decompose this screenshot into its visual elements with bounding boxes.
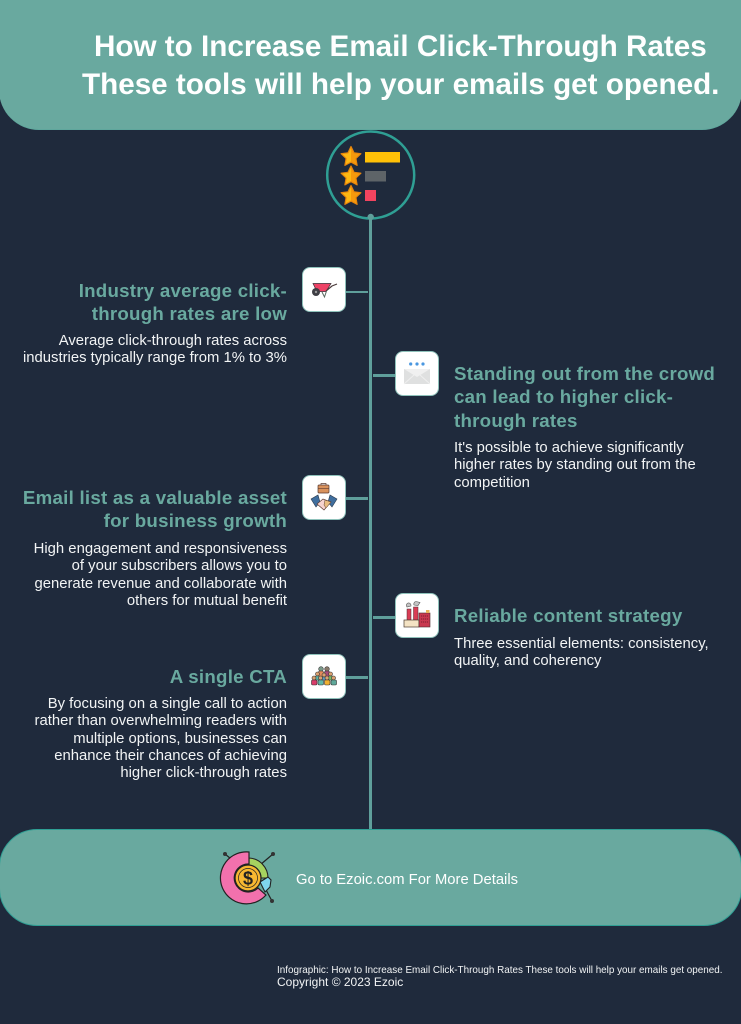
- description: of your subscribers allows you to: [72, 558, 287, 574]
- description: It's possible to achieve significantly: [454, 440, 684, 456]
- icon: star rating badge: [326, 130, 416, 220]
- title: These tools will help your emails get opened.: [82, 68, 719, 101]
- heading: [454, 363, 715, 431]
- icon: envelope: [395, 351, 439, 396]
- connector 4: [373, 616, 395, 618]
- description: [454, 440, 696, 491]
- description: others for mutual benefit: [127, 593, 287, 609]
- title: How to Increase Email Click-Through Rates: [94, 30, 707, 63]
- header banner: [0, 0, 741, 130]
- icon: crowd of people: [302, 654, 346, 699]
- connector 5: [346, 676, 368, 678]
- text block: email list: [23, 487, 287, 609]
- icon: dollar pie chart: $: [243, 868, 253, 888]
- heading: [23, 487, 287, 531]
- connector 3: [346, 497, 368, 500]
- description: enhance their chances of achieving: [54, 748, 287, 764]
- description: [35, 696, 287, 781]
- description: By focusing on a single call to action: [48, 696, 287, 712]
- heading: for business growth: [104, 510, 287, 531]
- description: higher click-through rates: [120, 765, 287, 781]
- heading: Standing out from the crowd: [454, 363, 715, 384]
- connector 2: [373, 374, 395, 376]
- text block: single CTA: [35, 666, 287, 781]
- icon: factory: [395, 593, 439, 638]
- description: Average click-through rates across: [59, 333, 287, 349]
- description: quality, and coherency: [454, 653, 601, 669]
- heading: [79, 280, 287, 324]
- text block: content strategy: [454, 605, 709, 669]
- heading: through rates: [454, 410, 578, 431]
- attribution: Infographic: How to Increase Email Click-Through Rates These tools will help your emails get opened.: [277, 965, 723, 976]
- description: [454, 636, 709, 669]
- call to action text: Go to Ezoic.com For More Details: [296, 872, 518, 888]
- attribution: [277, 965, 723, 989]
- text block: standing out: [454, 363, 715, 491]
- description: [34, 541, 287, 609]
- heading: Email list as a valuable asset: [23, 487, 287, 508]
- icon: wheelbarrow: [302, 267, 346, 312]
- timeline spine: [369, 216, 372, 830]
- description: High engagement and responsiveness: [34, 541, 287, 557]
- description: higher rates by standing out from the: [454, 457, 696, 473]
- connector 1: [346, 290, 368, 293]
- description: Three essential elements: consistency,: [454, 636, 709, 652]
- description: [23, 333, 287, 366]
- icon: dollar pie chart: [220, 851, 275, 904]
- footer banner: [0, 829, 741, 926]
- description: industries typically range from 1% to 3%: [23, 350, 287, 366]
- heading: through rates are low: [92, 303, 287, 324]
- description: rather than overwhelming readers with: [35, 713, 287, 729]
- description: competition: [454, 475, 530, 491]
- icon: handshake: [302, 475, 346, 520]
- heading: Industry average click-: [79, 280, 287, 300]
- description: generate revenue and collaborate with: [34, 576, 287, 592]
- heading: can lead to higher click-: [454, 386, 673, 407]
- title: [82, 30, 719, 101]
- heading: Reliable content strategy: [454, 605, 682, 626]
- attribution: Copyright © 2023 Ezoic: [277, 975, 403, 989]
- description: multiple options, businesses can: [73, 731, 287, 747]
- text block: industry average: [23, 280, 287, 366]
- heading: A single CTA: [170, 666, 287, 687]
